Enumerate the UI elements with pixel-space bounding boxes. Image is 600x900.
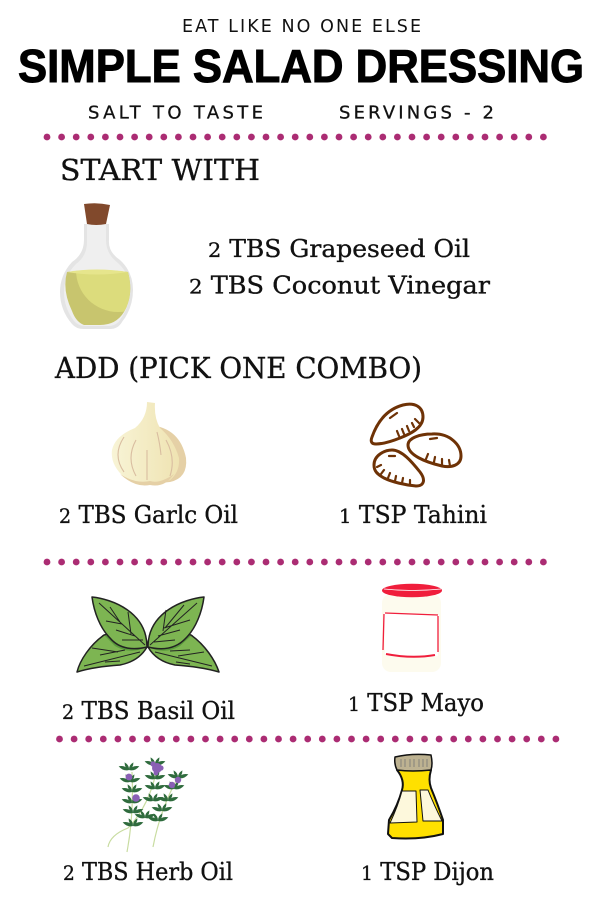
label: mayo: 1 TSP Mayo bbox=[348, 689, 484, 717]
label: dijon: 1 TSP Dijon bbox=[361, 858, 494, 886]
icon: mayo jar bbox=[382, 584, 442, 672]
label: herb oil: 2 TBS Herb Oil bbox=[63, 858, 233, 886]
heading: start with: START WITH bbox=[60, 153, 260, 187]
icon: oil bottle bbox=[60, 203, 133, 329]
ingredient: grapeseed oil: 2 TBS Grapeseed Oil bbox=[208, 235, 470, 263]
label: tahini: 1 TSP Tahini bbox=[339, 501, 487, 529]
ingredient: coconut vinegar: 2 TBS Coconut Vinegar bbox=[189, 272, 491, 300]
icon: herb sprigs bbox=[108, 757, 189, 852]
heading: add: ADD (PICK ONE COMBO) bbox=[54, 351, 422, 385]
label: garlic oil: 2 TBS Garlc Oil bbox=[59, 501, 238, 529]
servings note: SERVINGS - 2 bbox=[339, 102, 494, 124]
label: basil oil: 2 TBS Basil Oil bbox=[62, 697, 235, 725]
icon: garlic bbox=[112, 402, 186, 486]
salt note: SALT TO TASTE bbox=[88, 102, 263, 124]
icon: sesame seeds bbox=[371, 404, 461, 486]
tagline: EAT LIKE NO ONE ELSE bbox=[182, 17, 421, 37]
icon: basil leaves bbox=[77, 597, 219, 672]
icon: dijon jar bbox=[388, 754, 443, 838]
title: SIMPLE SALAD DRESSING bbox=[18, 40, 584, 92]
